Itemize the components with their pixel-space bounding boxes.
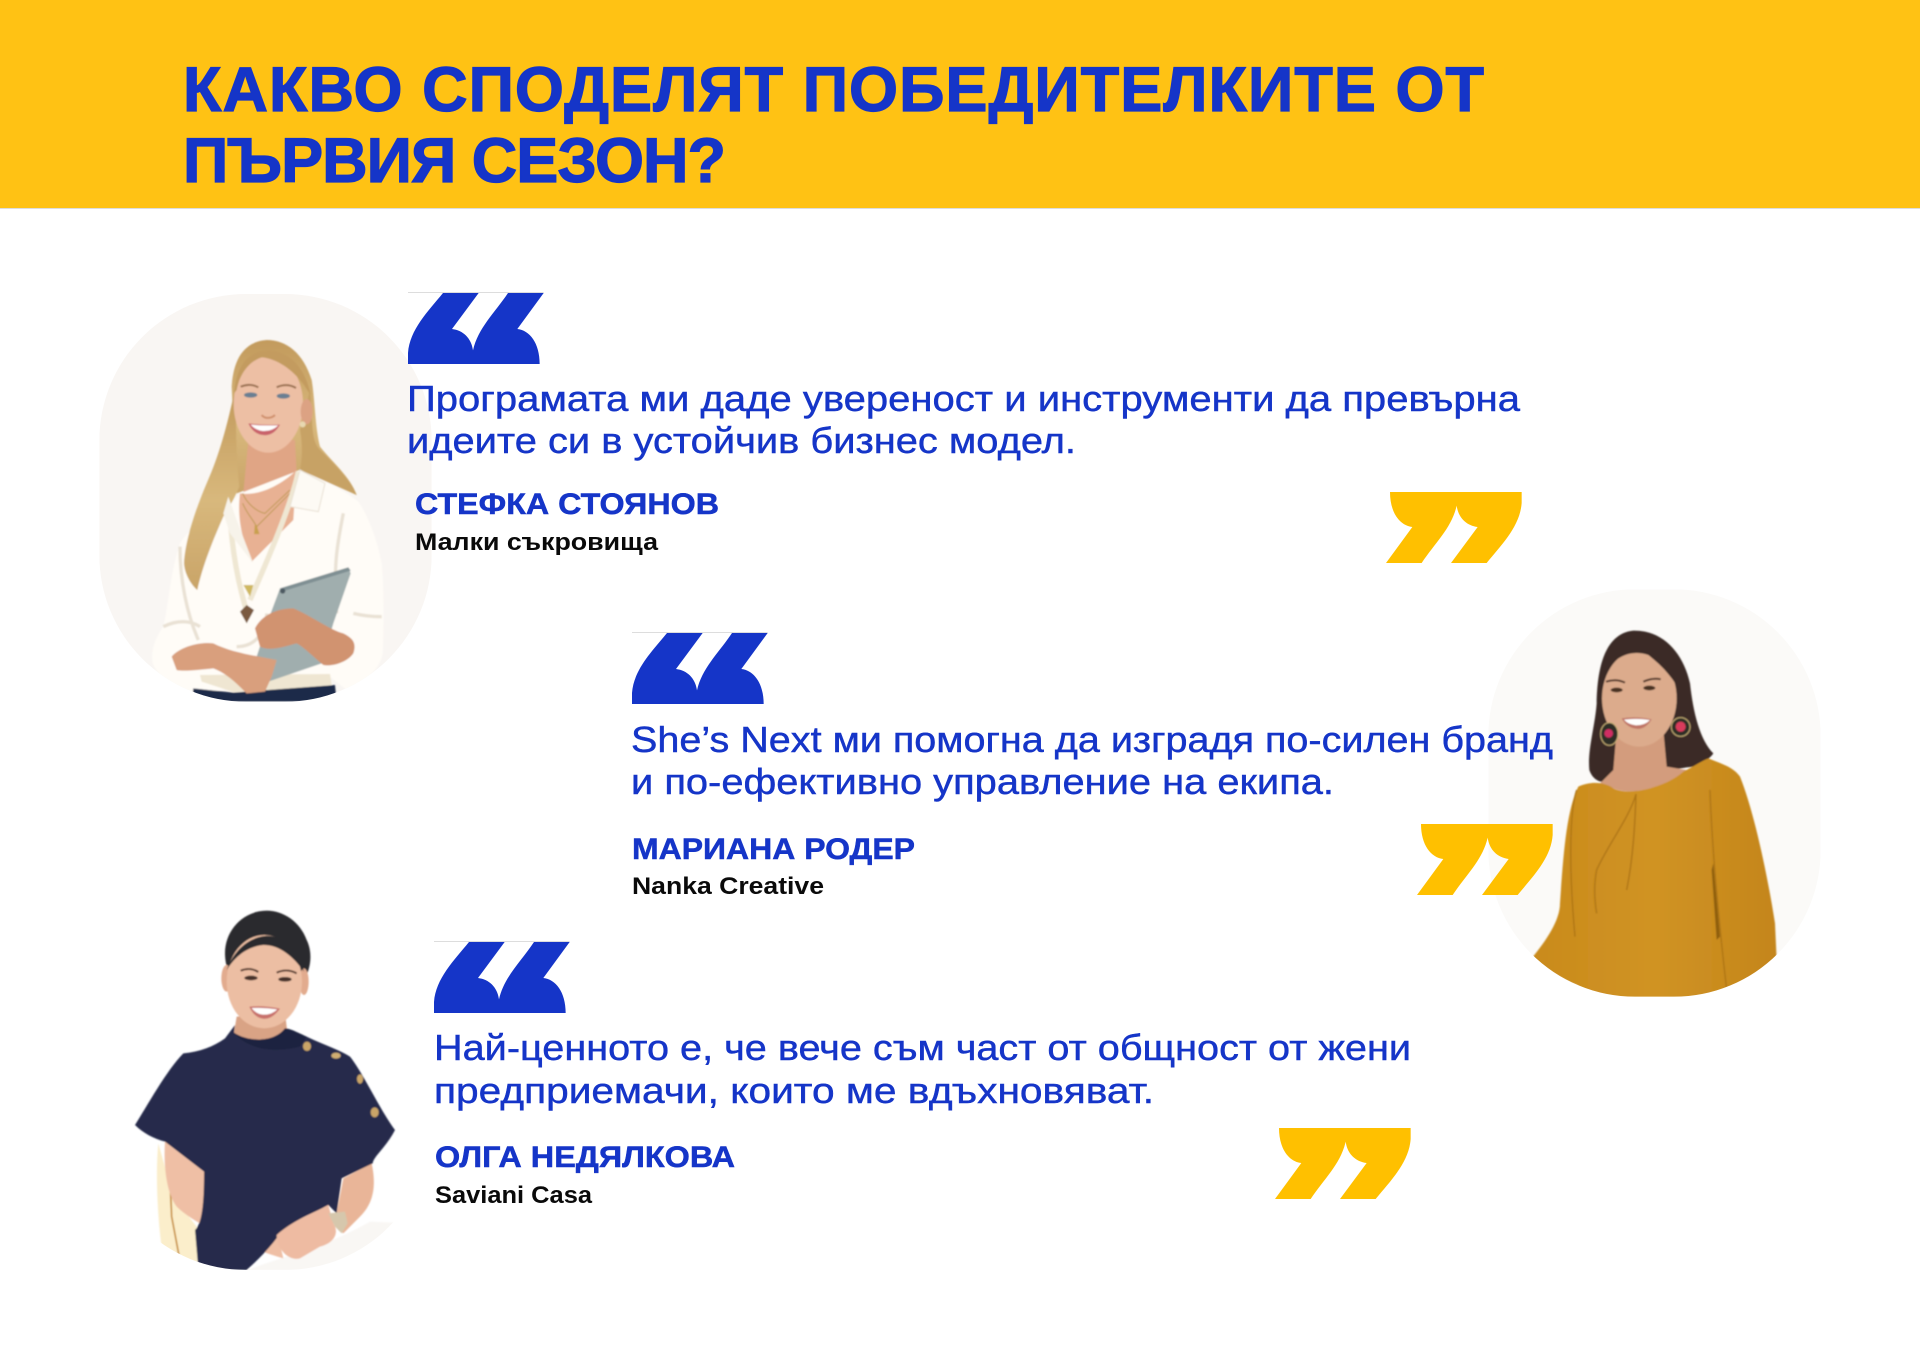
name: Стефка Стоянов: СТЕФКА СТОЯНОВ — [415, 488, 719, 521]
name: Олга Недялкова: ОЛГА НЕДЯЛКОВА — [435, 1141, 735, 1174]
portrait: Стефка Стоянов — [99, 294, 432, 702]
quote text 2 — [631, 719, 1553, 802]
title — [183, 55, 1484, 196]
quote mark: closing 1 — [1386, 492, 1522, 563]
quote text 1: Програмата ми даде увереност и инструменти да превърна — [407, 378, 1521, 419]
quote mark: opening 1 — [408, 292, 544, 364]
quote mark: closing 2 — [1417, 824, 1553, 895]
portrait: Мариана Родер — [1532, 629, 1778, 997]
title: КАКВО СПОДЕЛЯТ ПОБЕДИТЕЛКИТЕ ОТ — [183, 55, 1484, 125]
quote mark: closing 3 — [1275, 1128, 1411, 1199]
quote text 2: She’s Next ми помогна да изградя по-силен бранд — [631, 719, 1553, 760]
company: Saviani Casa: Saviani Casa — [435, 1182, 593, 1209]
quote text 3 — [434, 1027, 1411, 1111]
quote mark: opening 2 — [632, 632, 768, 704]
quote text 3: предприемачи, които ме вдъхновяват. — [434, 1070, 1154, 1111]
title: ПЪРВИЯ СЕЗОН? — [183, 126, 726, 196]
quote mark: opening 3 — [434, 941, 570, 1013]
company: Nanka Creative: Nanka Creative — [632, 873, 824, 900]
quote text 2: и по-ефективно управление на екипа. — [631, 761, 1334, 802]
name: Мариана Родер: МАРИАНА РОДЕР — [632, 833, 915, 866]
quote text 1 — [407, 378, 1521, 461]
company: Малки съкровища: Малки съкровища — [415, 529, 659, 556]
quote text 3: Най-ценното е, че вече съм част от общност от жени — [434, 1027, 1411, 1068]
portrait: Олга Недялкова — [134, 910, 396, 1270]
header band — [0, 0, 1920, 209]
quote text 1: идеите си в устойчив бизнес модел. — [407, 420, 1076, 461]
